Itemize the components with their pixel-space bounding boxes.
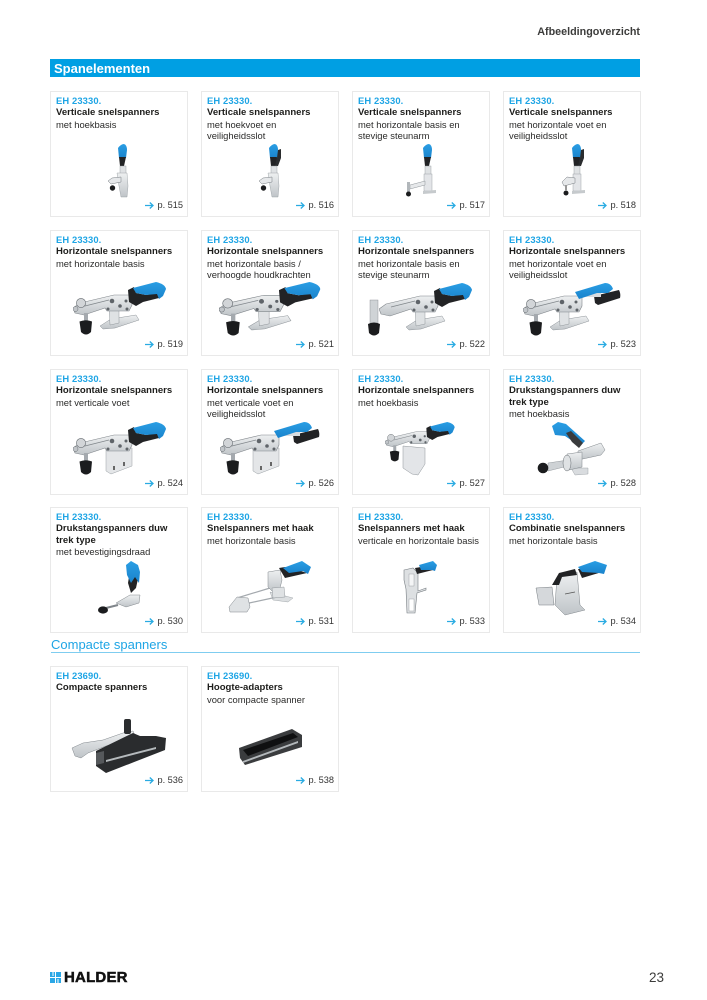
section banner: Spanelementen xyxy=(50,59,640,77)
card text: voor compacte spanner xyxy=(207,694,305,705)
card text: Horizontale snelspanners xyxy=(358,385,474,396)
card: Drukstangspanners met hoekbasis xyxy=(503,369,641,495)
card text: veiligheidsslot xyxy=(509,130,567,141)
page reference: p. 526 xyxy=(308,478,334,488)
card: Horizontale snelspanners met veiligheidsslot xyxy=(503,230,641,356)
card text xyxy=(207,670,337,705)
card: Drukstangspanners met bevestigingsdraad xyxy=(50,507,188,633)
card text: met horizontale basis xyxy=(207,535,296,546)
page reference xyxy=(598,339,636,349)
logo mark xyxy=(50,972,61,983)
card text: EH 23330. xyxy=(358,511,403,522)
page reference: p. 528 xyxy=(610,478,636,488)
card: Horizontale snelspanners met verticale voet xyxy=(50,369,188,495)
icon: vertical clamp with lock xyxy=(562,144,585,196)
card text xyxy=(207,95,310,141)
page reference: p. 515 xyxy=(157,200,183,210)
card text: met hoekbasis xyxy=(358,397,418,408)
card text xyxy=(207,373,323,419)
card: Snelspanners met haak met horizontale basis xyxy=(201,507,339,633)
card: Horizontale snelspanners verhoogde houdkrachten xyxy=(201,230,339,356)
page reference: p. 538 xyxy=(308,775,334,785)
card text: met verticale voet en xyxy=(207,397,294,408)
card text xyxy=(358,234,474,280)
card text: met bevestigingsdraad xyxy=(56,546,150,557)
page reference: p. 518 xyxy=(610,200,636,210)
card text: EH 23330. xyxy=(509,373,554,384)
icon: height adapter xyxy=(239,729,302,765)
card text xyxy=(56,670,186,694)
card: Verticale snelspanners met hoekvoet xyxy=(201,91,339,217)
card text: Drukstangspanners duw xyxy=(509,385,620,396)
card: Verticale snelspanners met horizontale basis xyxy=(352,91,490,217)
icon: hook clamp xyxy=(229,561,311,613)
card text: EH 23330. xyxy=(358,95,403,106)
page reference xyxy=(598,478,636,488)
card text: Compacte spanners xyxy=(56,682,147,693)
page reference xyxy=(296,200,334,210)
card text: EH 23330. xyxy=(207,511,252,522)
page reference: p. 523 xyxy=(610,339,636,349)
icon: combination clamp xyxy=(536,561,607,615)
icon: hook clamp vertical xyxy=(404,561,438,614)
card text: Verticale snelspanners xyxy=(509,107,612,118)
icon: horizontal clamp with lock xyxy=(523,283,620,336)
section heading: Compacte spanners xyxy=(51,637,640,653)
card text: EH 23330. xyxy=(509,234,554,245)
icon: vertical clamp on horizontal base xyxy=(406,144,436,196)
page reference xyxy=(145,616,183,626)
card text: EH 23330. xyxy=(56,511,101,522)
card text: Horizontale snelspanners xyxy=(509,246,625,257)
card: Compacte spanners xyxy=(50,666,188,792)
card text: Verticale snelspanners xyxy=(358,107,461,118)
icon: compact clamp xyxy=(72,719,166,773)
icon: push-pull clamp xyxy=(538,422,606,476)
icon: push-pull clamp upright xyxy=(98,561,140,614)
card text: met horizontale voet en xyxy=(509,119,606,130)
card text: EH 23690. xyxy=(56,670,101,681)
card text: veiligheidsslot xyxy=(207,130,265,141)
card text: EH 23330. xyxy=(509,95,554,106)
page reference xyxy=(145,775,183,786)
page reference: p. 522 xyxy=(459,339,485,349)
card text xyxy=(56,234,172,269)
card text: Combinatie snelspanners xyxy=(509,523,625,534)
page reference xyxy=(296,339,334,349)
icon: horizontal clamp vertical foot xyxy=(73,422,166,474)
card text xyxy=(509,95,612,141)
card text: EH 23330. xyxy=(207,373,252,384)
icon: horizontal clamp vertical foot with lock xyxy=(220,422,320,474)
card text: met horizontale basis en xyxy=(358,119,460,130)
page reference: p. 517 xyxy=(459,200,485,210)
card text: EH 23330. xyxy=(509,511,554,522)
icon: horizontal clamp xyxy=(73,282,166,334)
page heading: Afbeeldingoverzicht xyxy=(537,26,640,38)
page reference: p. 516 xyxy=(308,200,334,210)
card text xyxy=(509,234,625,280)
card text: Drukstangspanners duw xyxy=(56,523,167,534)
card text: stevige steunarm xyxy=(358,269,429,280)
card text: met horizontale voet en xyxy=(509,258,606,269)
page reference xyxy=(598,616,636,627)
card text: EH 23690. xyxy=(207,670,252,681)
card: Combinatie snelspanners xyxy=(503,507,641,633)
icon: horizontal clamp with support arm xyxy=(368,283,472,336)
card text: verhoogde houdkrachten xyxy=(207,269,311,280)
card text xyxy=(207,511,314,546)
page reference xyxy=(447,478,485,488)
section heading: Compacte spanners: Compacte spanners xyxy=(51,637,167,652)
logo wordmark: HALDER xyxy=(64,969,128,986)
card text xyxy=(358,95,461,141)
card text: trek type xyxy=(56,535,96,546)
page reference xyxy=(145,339,183,349)
card text: Horizontale snelspanners xyxy=(358,246,474,257)
card text: Horizontale snelspanners xyxy=(56,385,172,396)
card text: verticale en horizontale basis xyxy=(358,535,479,546)
card text: Verticale snelspanners xyxy=(207,107,310,118)
page reference xyxy=(447,200,485,210)
card text: EH 23330. xyxy=(56,95,101,106)
icon: horizontal clamp angle base xyxy=(385,422,455,476)
page reference: p. 521 xyxy=(308,339,334,349)
card text: Snelspanners met haak xyxy=(207,523,314,534)
card text: Verticale snelspanners xyxy=(56,107,159,118)
page reference xyxy=(145,200,183,210)
card: Verticale snelspanners met hoekbasis xyxy=(50,91,188,217)
icon: vertical clamp with lock xyxy=(259,144,281,198)
card text: Hoogte-adapters xyxy=(207,682,283,693)
card text: Snelspanners met haak xyxy=(358,523,465,534)
card text: EH 23330. xyxy=(358,373,403,384)
card: Horizontale snelspanners met horizontale basis xyxy=(50,230,188,356)
card: Horizontale snelspanners verticale voet veiligheidsslot xyxy=(201,369,339,495)
card text xyxy=(207,234,323,280)
page reference xyxy=(447,339,485,349)
card text: stevige steunarm xyxy=(358,130,429,141)
card text: veiligheidsslot xyxy=(509,269,567,280)
page reference: p. 536 xyxy=(157,775,183,785)
card text: met hoekbasis xyxy=(56,119,116,130)
card text: met hoekvoet en xyxy=(207,119,276,130)
card text: met horizontale basis / xyxy=(207,258,301,269)
page reference xyxy=(296,478,334,488)
card text: EH 23330. xyxy=(56,373,101,384)
page reference: p. 534 xyxy=(610,616,636,626)
page reference xyxy=(598,200,636,210)
card text: met horizontale basis xyxy=(509,535,598,546)
section banner: Spanelementen: Spanelementen xyxy=(54,61,150,76)
icon: vertical clamp xyxy=(108,144,128,198)
card text: Horizontale snelspanners xyxy=(207,385,323,396)
page reference: p. 519 xyxy=(157,339,183,349)
page reference: p. 530 xyxy=(157,616,183,626)
page reference: p. 524 xyxy=(157,478,183,488)
page reference: p. 533 xyxy=(459,616,485,626)
page reference xyxy=(145,478,183,488)
card text: met horizontale basis en xyxy=(358,258,460,269)
card text xyxy=(56,511,168,557)
card text xyxy=(56,95,159,130)
card text: met verticale voet xyxy=(56,397,129,408)
page number: 23 xyxy=(649,970,664,985)
card text: met horizontale basis xyxy=(56,258,145,269)
card text: EH 23330. xyxy=(56,234,101,245)
card text: Horizontale snelspanners xyxy=(207,246,323,257)
card text: veiligheidsslot xyxy=(207,408,265,419)
card text xyxy=(509,373,620,419)
card text xyxy=(509,511,639,546)
card text xyxy=(56,373,172,408)
card: Verticale snelspanners met horizontale voet xyxy=(503,91,641,217)
card text: EH 23330. xyxy=(207,234,252,245)
page reference: p. 527 xyxy=(459,478,485,488)
card: Snelspanners met haak verticale en horizontale basis xyxy=(352,507,490,633)
card text: Horizontale snelspanners xyxy=(56,246,172,257)
page reference xyxy=(296,775,334,786)
card: Horizontale snelspanners met stevige steunarm xyxy=(352,230,490,356)
page reference xyxy=(296,616,334,627)
card text: met hoekbasis xyxy=(509,408,569,419)
card: Horizontale snelspanners met hoekbasis xyxy=(352,369,490,495)
card text: EH 23330. xyxy=(207,95,252,106)
card text: trek type xyxy=(509,397,549,408)
card text xyxy=(358,511,488,546)
logo: HALDER xyxy=(50,971,128,984)
card: Hoogte-adapters xyxy=(201,666,339,792)
icon: heavy horizontal clamp xyxy=(219,282,320,336)
card text xyxy=(358,373,474,408)
card text: EH 23330. xyxy=(358,234,403,245)
page reference xyxy=(447,616,485,627)
page reference: p. 531 xyxy=(308,616,334,626)
